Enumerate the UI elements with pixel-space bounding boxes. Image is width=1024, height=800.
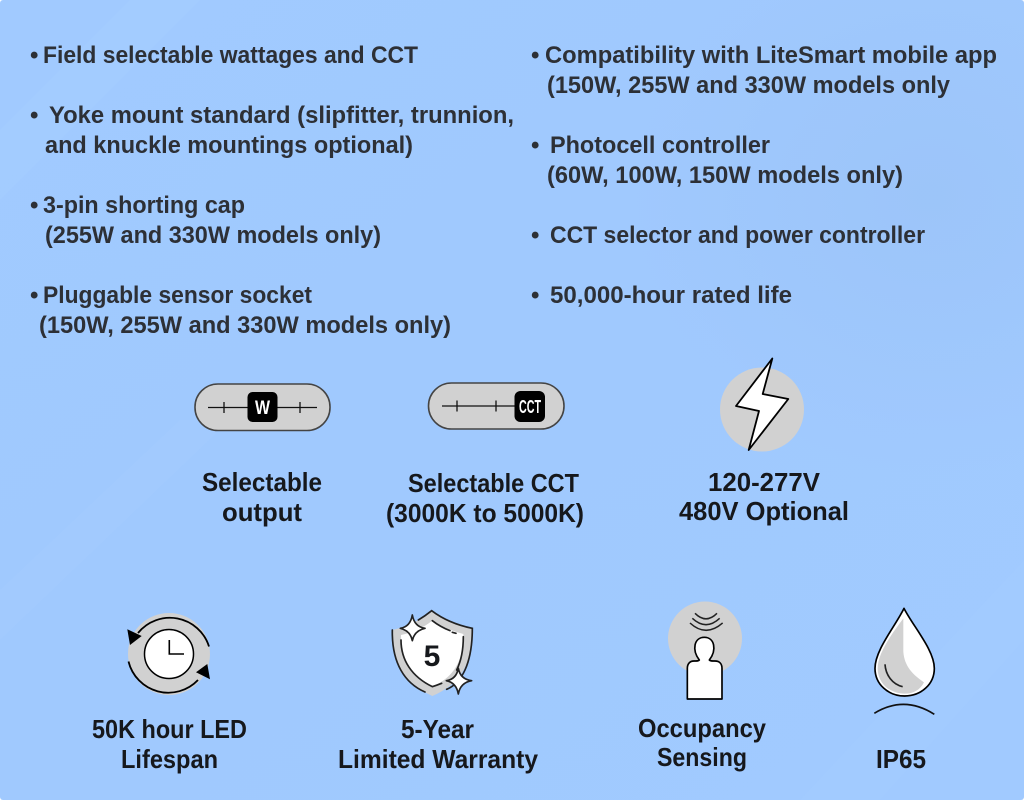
label: IP65: IP65 [876,744,926,774]
left feature list: (150W, 255W and 330W models only) [39,312,451,339]
right feature list: • [531,132,539,159]
left feature list: 3-pin shorting cap [43,192,245,219]
icon: clock with cycle arrows [127,618,210,693]
left feature list: (255W and 330W models only) [45,222,381,249]
right feature list: (150W, 255W and 330W models only [547,72,951,99]
label: voltage: 120-277V [708,467,821,497]
right feature list: • [531,42,539,69]
icon: occupancy sensor [668,602,742,699]
icon: water drop [874,608,934,714]
left feature list: Field selectable wattages and CCT [43,42,418,69]
icon: wattage slider: W [255,398,270,419]
icon: lightning bolt [720,358,804,452]
left feature list: • [30,282,38,309]
left feature list: • [30,102,38,129]
icon: warranty shield [392,611,472,696]
right feature list: Photocell controller [550,132,770,159]
left feature list [30,42,514,339]
left feature list: and knuckle mountings optional) [45,132,413,159]
right feature list: • [531,282,539,309]
icon: CCT slider [428,383,564,429]
left feature list: • [30,192,38,219]
label: selectable output [202,467,322,527]
left feature list: Pluggable sensor socket [43,282,312,309]
label: selectable output: output [222,497,302,527]
label: warranty: 5-Year [401,714,474,744]
icon: wattage slider [195,384,330,430]
label: occupancy sensing [638,713,766,772]
label: warranty: Limited Warranty [338,744,539,774]
label: occupancy sensing: Sensing [657,742,747,772]
label: lifespan: 50K hour LED [92,714,247,744]
right feature list: CCT selector and power controller [550,222,925,249]
icon: warranty shield: 5 [424,640,440,673]
label: voltage: 480V Optional [679,496,849,526]
left feature list: • [30,42,38,69]
label: selectable CCT [386,468,584,528]
right feature list: Compatibility with LiteSmart mobile app [545,42,997,69]
icon: CCT slider: CCT [519,397,541,417]
label: occupancy sensing: Occupancy [638,713,766,743]
label: warranty [338,714,539,774]
right feature list: 50,000-hour rated life [550,282,792,309]
right feature list [531,42,997,309]
label: lifespan: Lifespan [121,744,218,774]
label: selectable output: Selectable [202,467,322,497]
label: lifespan [92,714,247,774]
left feature list: Yoke mount standard (slipfitter, trunnion, [49,102,514,129]
label: selectable CCT: (3000K to 5000K) [386,498,584,528]
label: selectable CCT: Selectable CCT [408,468,579,498]
right feature list: • [531,222,539,249]
label: voltage [679,467,849,526]
right feature list: (60W, 100W, 150W models only) [547,162,903,189]
